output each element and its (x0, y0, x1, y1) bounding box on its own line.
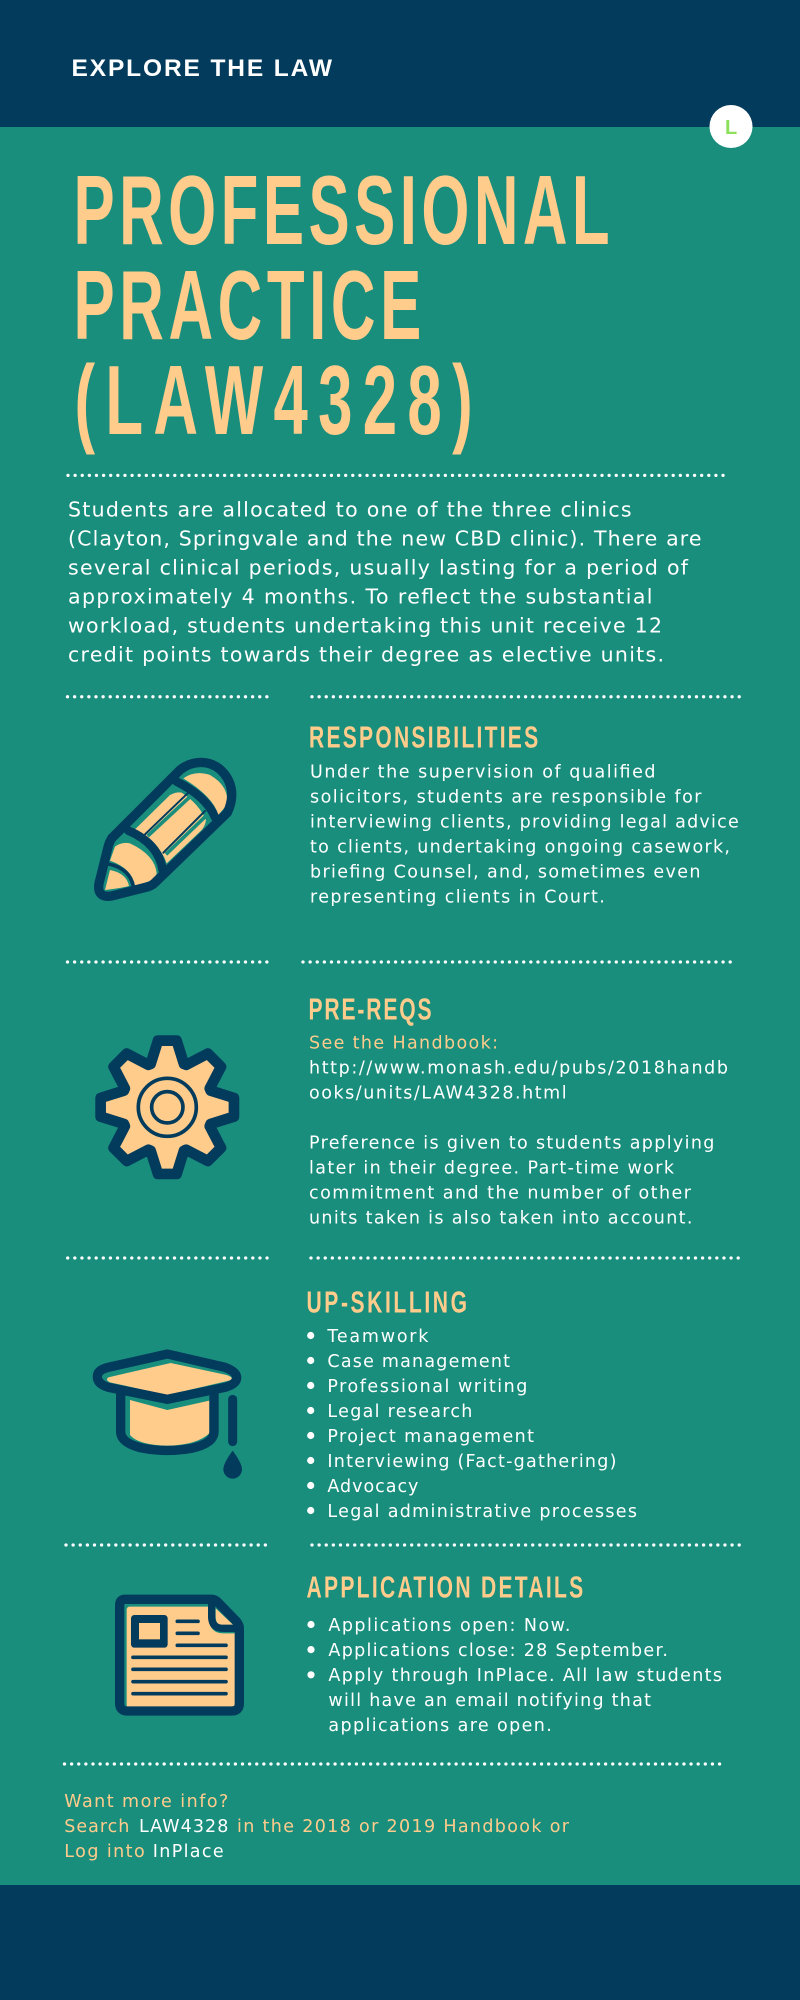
icon: document (120, 1599, 239, 1711)
intro text: (Clayton, Springvale and the new CBD clinic). There are (68, 526, 702, 550)
more info text: Search (64, 1817, 129, 1837)
icon: graduation cap (97, 1354, 242, 1479)
skills list: Case management (327, 1352, 510, 1372)
handbook link: See the Handbook: (309, 1034, 498, 1054)
skills list: Advocacy (327, 1477, 418, 1497)
body text: interviewing clients, providing legal advice (310, 812, 739, 832)
application list: Applications close: 28 September. (328, 1641, 668, 1661)
icon: gear (101, 1041, 234, 1174)
body text (310, 762, 739, 908)
body text: solicitors, students are responsible for (310, 788, 702, 808)
application list (307, 1616, 722, 1736)
preference text: commitment and the number of other (309, 1184, 692, 1204)
more info text: Want more info? (64, 1792, 228, 1812)
header band (0, 0, 800, 127)
skills list: Professional writing (327, 1377, 527, 1397)
preference text: Preference is given to students applying (309, 1134, 714, 1154)
section: pre-reqs (308, 991, 728, 1229)
footer band (0, 1885, 800, 2000)
section: up-skilling (306, 1285, 637, 1522)
more info text: Log into (64, 1842, 145, 1862)
handbook link (309, 1034, 728, 1104)
intro text (68, 498, 702, 667)
heading: UP-SKILLING (306, 1285, 467, 1320)
intro text: credit points towards their degree as elective units. (68, 643, 664, 667)
application list: Apply through InPlace. All law students (328, 1666, 722, 1686)
handbook link: ooks/units/LAW4328.html (309, 1084, 567, 1104)
title: PRACTICE (74, 252, 421, 361)
heading: APPLICATION DETAILS (306, 1570, 583, 1605)
preference text (309, 1134, 714, 1229)
intro text: Students are allocated to one of the three clinics (68, 498, 632, 522)
title: PROFESSIONAL (74, 157, 610, 266)
application list: applications are open. (328, 1716, 552, 1736)
skills list: Teamwork (326, 1327, 429, 1347)
title: (LAW4328) (74, 347, 473, 456)
section: application details (306, 1570, 722, 1736)
body text: to clients, undertaking ongoing casework, (310, 838, 730, 858)
body text: briefing Counsel, and, sometimes even (310, 862, 700, 882)
intro text: workload, students undertaking this unit receive 12 (68, 614, 662, 638)
preference text: units taken is also taken into account. (309, 1209, 692, 1229)
header label: EXPLORE THE LAW (72, 55, 333, 82)
skills list: Interviewing (Fact-gathering) (327, 1452, 616, 1472)
heading: RESPONSIBILITIES (309, 719, 538, 755)
intro text: approximately 4 months. To reflect the substantial (68, 585, 652, 609)
more info text (64, 1792, 570, 1862)
skills list: Legal administrative processes (327, 1502, 637, 1522)
icon: pencil (99, 762, 232, 896)
body text: representing clients in Court. (310, 888, 605, 908)
logo badge (710, 105, 752, 148)
logo badge: L (725, 117, 737, 139)
application list: will have an email notifying that (328, 1691, 651, 1711)
more info text: in the 2018 or 2019 Handbook or (237, 1817, 570, 1837)
more info text: LAW4328 (139, 1817, 228, 1837)
handbook link: http://www.monash.edu/pubs/2018handb (309, 1059, 728, 1079)
section: responsibilities (309, 719, 739, 908)
heading: PRE-REQS (308, 991, 432, 1026)
title (74, 157, 610, 456)
application list: Applications open: Now. (328, 1616, 570, 1636)
skills list: Legal research (327, 1402, 472, 1422)
more info text: InPlace (153, 1842, 224, 1862)
intro text: several clinical periods, usually lasting for a period of (68, 556, 689, 580)
body text: Under the supervision of qualified (310, 762, 656, 782)
preference text: later in their degree. Part-time work (309, 1159, 675, 1179)
skills list (307, 1327, 637, 1522)
skills list: Project management (327, 1427, 534, 1447)
